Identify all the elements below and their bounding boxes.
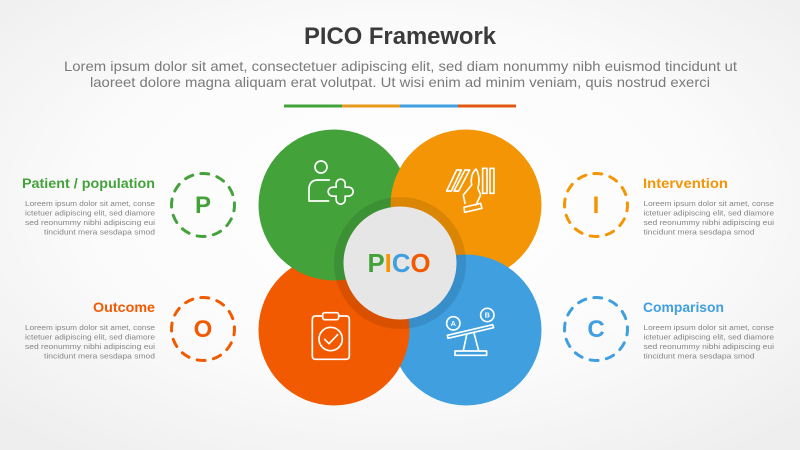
- circle: outcome red: [258, 254, 410, 406]
- petal circles diagram: [258, 130, 542, 406]
- circle: comparison blue: [390, 254, 542, 406]
- body text: comparison: tincidunt mera sesdapa smod: [644, 354, 755, 360]
- heading: outcome: Outcome: [93, 300, 156, 315]
- icon: balance seesaw: [447, 308, 494, 355]
- body text: outcome: tincidunt mera sesdapa smod: [44, 354, 155, 360]
- badge: I: [562, 171, 630, 239]
- icon: hand with bars: [447, 168, 494, 212]
- badge: O: O: [194, 316, 212, 343]
- center ring shadow: [334, 197, 466, 329]
- body text: comparison: sed reonummy nibhi adipiscing eui: [644, 344, 775, 351]
- icon: balance seesaw: A: [451, 319, 457, 328]
- panel: outcome: [25, 295, 237, 363]
- body text: intervention: sed reonummy nibhi adipiscing eui: [644, 220, 775, 227]
- body text: outcome: sed reonummy nibhi adipiscing eui: [25, 344, 156, 351]
- body text: patient: ictetuer adipiscing elit, sed diamore: [25, 210, 155, 218]
- panel: intervention: [562, 171, 775, 239]
- badge: C: [562, 295, 630, 363]
- heading: comparison: Comparison: [643, 300, 724, 315]
- body text: intervention: tincidunt mera sesdapa smod: [644, 230, 755, 236]
- body text: outcome: ictetuer adipiscing elit, sed diamore: [25, 334, 155, 342]
- multicolor title divider: [284, 104, 516, 108]
- icon: clipboard with check: [312, 313, 349, 359]
- heading: patient: Patient / population: [22, 176, 155, 191]
- panel: comparison: [562, 295, 775, 363]
- subtitle text: laoreet dolore magna aliquam erat volutpat. Ut wisi enim ad minim veniam, quis nostrud exerci: [90, 74, 710, 90]
- badge: C: C: [587, 316, 605, 343]
- panel: patient / population: [22, 171, 237, 239]
- icon: patient with plus: [309, 161, 349, 201]
- body text: outcome: Loreem ipsum dolor sit amet, conse: [25, 325, 155, 332]
- center circle: [344, 206, 456, 320]
- circle: intervention orange: [390, 130, 542, 280]
- badge: O: [169, 295, 237, 363]
- center label PICO: PICO: [368, 248, 430, 278]
- body text: outcome: [25, 325, 156, 360]
- body text: patient: tincidunt mera sesdapa smod: [44, 230, 155, 236]
- body text: comparison: ictetuer adipiscing elit, sed diamore: [644, 334, 774, 342]
- body text: intervention: ictetuer adipiscing elit, sed diamore: [644, 210, 774, 218]
- title: PICO Framework: [304, 23, 497, 50]
- body text: intervention: [644, 201, 775, 236]
- body text: comparison: [644, 325, 775, 360]
- body text: patient: [25, 201, 156, 236]
- body text: intervention: Loreem ipsum dolor sit amet, conse: [644, 201, 774, 208]
- circle: patient green: [258, 130, 410, 280]
- subtitle text: [64, 58, 737, 90]
- body text: patient: Loreem ipsum dolor sit amet, conse: [25, 201, 155, 208]
- subtitle text: Lorem ipsum dolor sit amet, consectetuer adipiscing elit, sed diam nonummy nibh euismod tincidunt ut: [64, 58, 737, 74]
- body text: patient: sed reonummy nibhi adipiscing eui: [25, 220, 156, 227]
- badge: P: [169, 171, 237, 239]
- infographic canvas: [22, 26, 774, 406]
- heading: intervention: Intervention: [643, 176, 728, 191]
- circle: orange overlap above green: [390, 154, 410, 208]
- badge: I: I: [593, 192, 599, 219]
- icon: balance seesaw: B: [485, 311, 490, 320]
- body text: comparison: Loreem ipsum dolor sit amet, conse: [644, 325, 774, 332]
- badge: P: P: [195, 192, 211, 219]
